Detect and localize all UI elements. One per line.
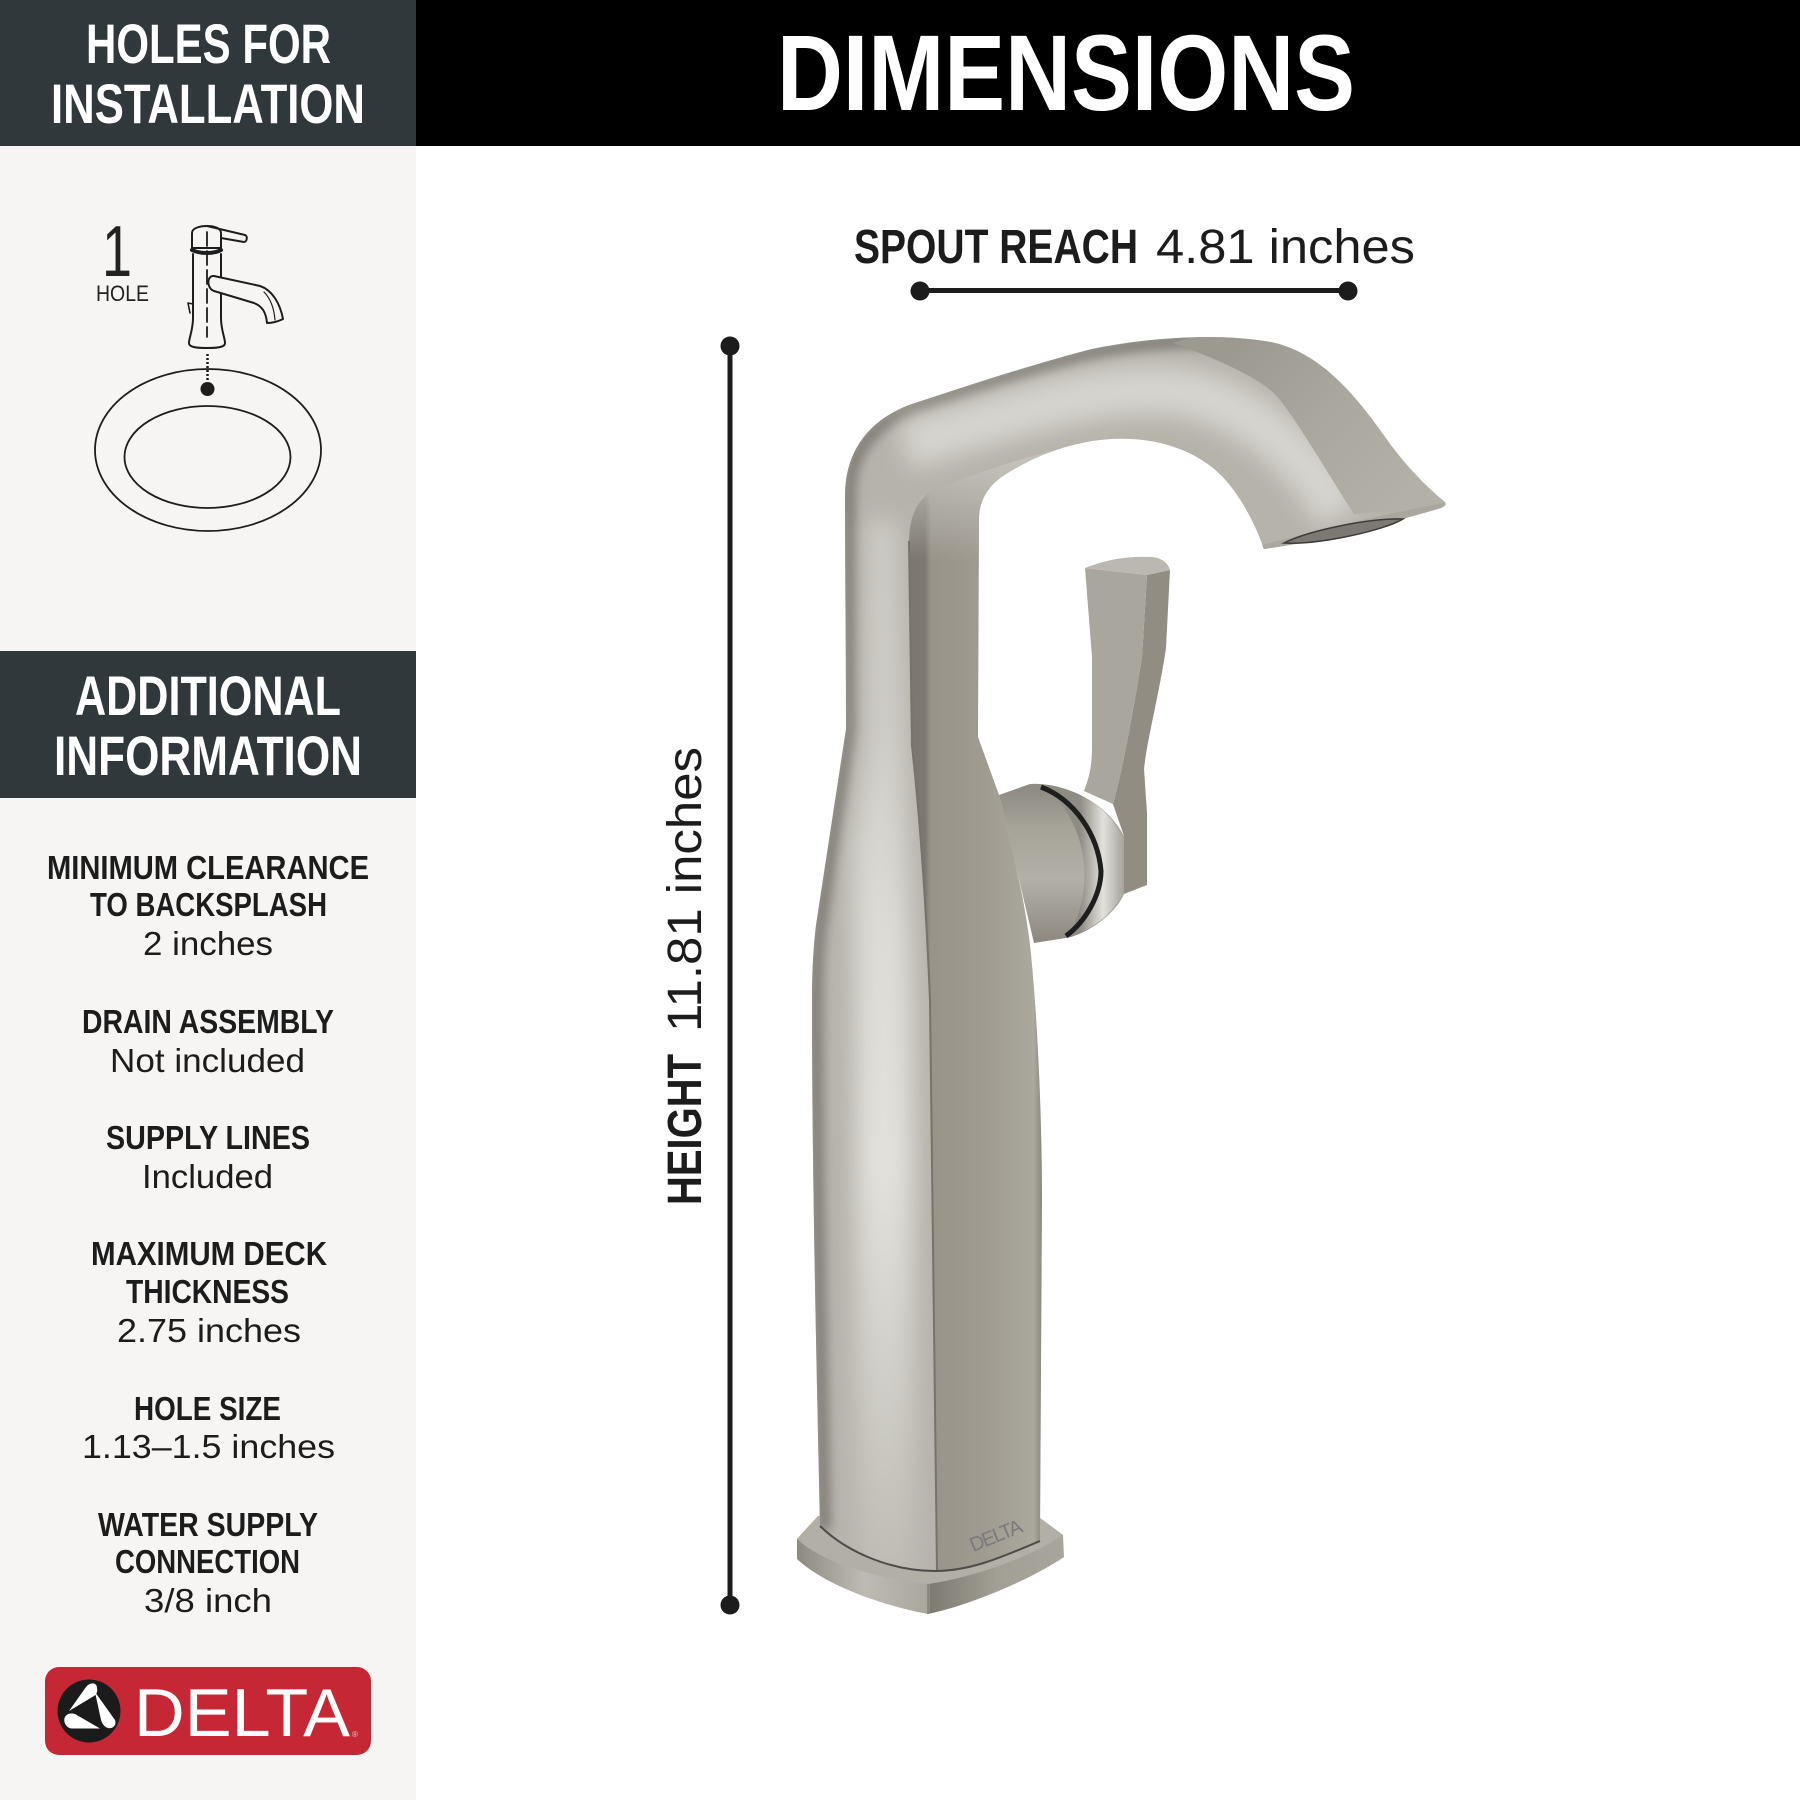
- faucet right body face: [909, 441, 1092, 1571]
- text block: hole size: HOLE SIZE: [134, 1390, 281, 1427]
- heading: additional information: INFORMATION: [54, 724, 362, 787]
- logo: delta: ®: [352, 1730, 358, 1739]
- logo: delta: DELTA: [134, 1675, 351, 1751]
- faucet spout outer face: [1173, 336, 1446, 514]
- text block: water supply connection: [98, 1506, 318, 1619]
- heading: holes for installation: [51, 12, 365, 135]
- icon: one hole count label: 1: [102, 212, 132, 292]
- text block: minimum clearance: 2 inches: [143, 925, 273, 962]
- panel: additional information header: [0, 651, 416, 798]
- text block: supply lines: SUPPLY LINES: [106, 1119, 310, 1156]
- faucet body and arm: [800, 320, 1460, 1580]
- faucet lever handle: [1084, 557, 1170, 894]
- text block: maximum deck thickness: MAXIMUM DECK: [91, 1235, 327, 1272]
- icon: dotted connector to hole: [206, 354, 209, 380]
- text block: minimum clearance: MINIMUM CLEARANCE: [47, 849, 369, 886]
- panel: holes for installation header: [0, 0, 416, 146]
- title: dimensions: DIMENSIONS: [777, 12, 1355, 133]
- text block: maximum deck thickness: 2.75 inches: [117, 1312, 301, 1349]
- dimension: spout reach label: SPOUT REACH: [854, 221, 1138, 274]
- faucet aerator: [1262, 503, 1445, 549]
- panel: dimensions header: [416, 0, 1800, 146]
- product: faucet: [797, 320, 1460, 1614]
- dimension: spout reach line: [910, 282, 1358, 300]
- icon: one hole count label: HOLE: [96, 281, 149, 306]
- text block: drain assembly: DRAIN ASSEMBLY: [82, 1003, 334, 1040]
- text block: maximum deck thickness: [91, 1235, 327, 1349]
- icon: one hole count label: [96, 212, 149, 306]
- heading: additional information: ADDITIONAL: [75, 664, 341, 727]
- text block: drain assembly: Not included: [110, 1042, 305, 1079]
- icon: sink basin with mounting hole: [95, 369, 321, 531]
- text block: water supply connection: 3/8 inch: [144, 1582, 272, 1619]
- faucet base plate: [797, 1516, 1064, 1614]
- logo: delta: [45, 1667, 371, 1755]
- dimension: spout reach label: 4.81 inches: [1156, 221, 1415, 274]
- text block: hole size: 1.13–1.5 inches: [82, 1428, 335, 1465]
- dimension: spout reach label: [854, 221, 1415, 274]
- faucet body bottom shadow: [820, 1526, 1040, 1571]
- faucet handle hub: [999, 784, 1124, 943]
- dimension: height label: HEIGHT: [659, 1054, 712, 1205]
- faucet logo mark: DELTA: [967, 1515, 1026, 1557]
- text block: hole size: [82, 1390, 335, 1465]
- text block: supply lines: [106, 1119, 310, 1195]
- heading: holes for installation: INSTALLATION: [51, 72, 365, 135]
- text block: water supply connection: CONNECTION: [115, 1543, 300, 1580]
- dimension: height label: 11.81 inches: [659, 747, 712, 1032]
- text block: supply lines: Included: [142, 1158, 273, 1195]
- dimension: height label: [659, 747, 712, 1205]
- text block: drain assembly: [82, 1003, 334, 1079]
- faucet under arm band: [909, 448, 1061, 548]
- panel: sidebar background: [0, 0, 416, 1800]
- text block: minimum clearance: [47, 849, 369, 962]
- text block: water supply connection: WATER SUPPLY: [98, 1506, 318, 1543]
- dimension: height line: [720, 336, 740, 1614]
- faucet ridge line: [909, 541, 937, 1571]
- text block: maximum deck thickness: THICKNESS: [126, 1273, 289, 1310]
- heading: additional information: [54, 664, 362, 787]
- heading: holes for installation: HOLES FOR: [86, 12, 331, 75]
- icon: small faucet line drawing: [188, 226, 283, 348]
- text block: minimum clearance: TO BACKSPLASH: [90, 886, 327, 923]
